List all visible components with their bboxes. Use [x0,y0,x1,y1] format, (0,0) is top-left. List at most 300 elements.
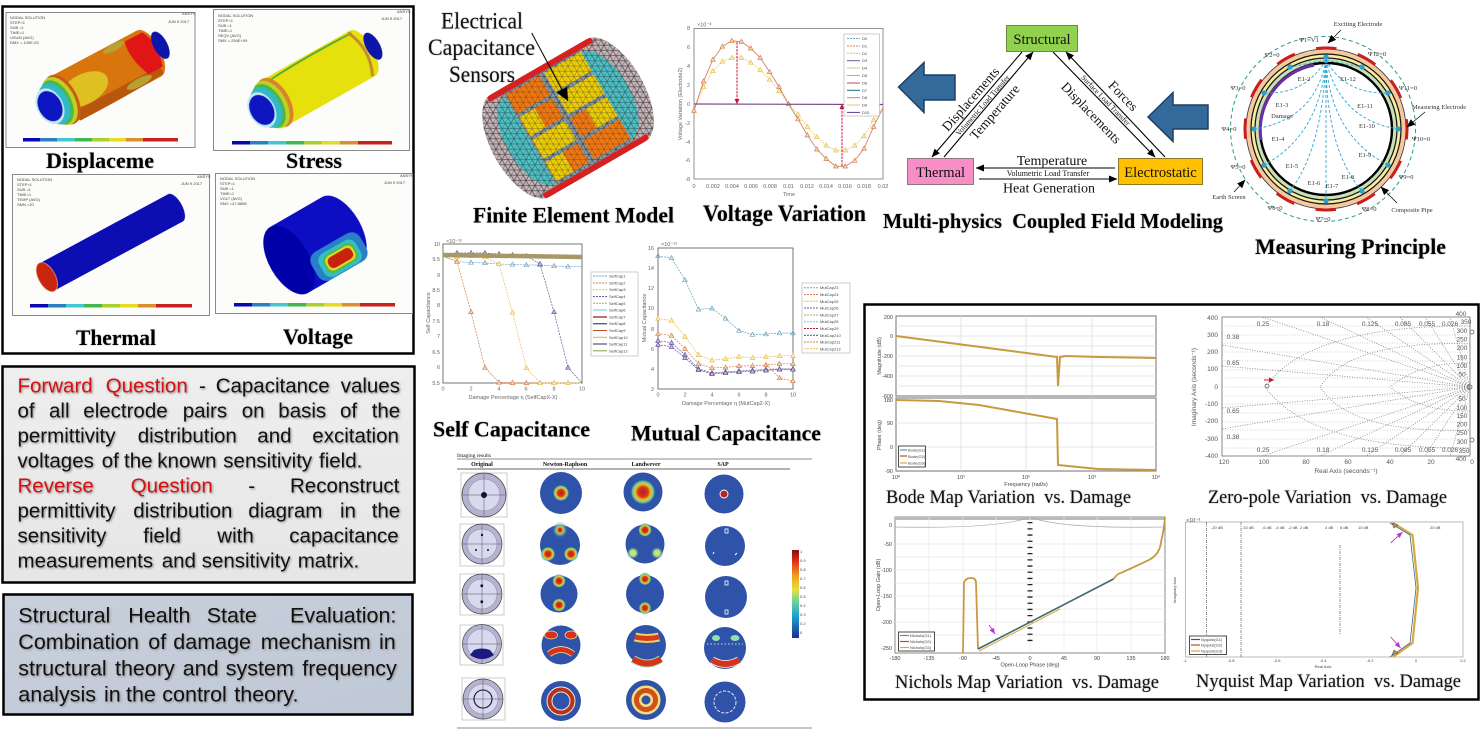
figure: thermal contour: SMN =20 [17,202,35,207]
legend: MutCap24 [820,292,839,297]
panel: forward and reverse question [2,366,414,582]
chart: zero-pole map: 0.38 [1227,434,1240,441]
figure: thermal contour: NODAL SOLUTION [17,177,52,182]
marker: peak arrow [736,42,738,104]
chart: nyquist map: -0.4 [1320,658,1327,663]
chart: nichols map: -250 [881,646,892,652]
chart: voltage variation: -2 [685,121,690,127]
chart: nichols map: 45 [1061,656,1067,662]
chart: nichols map: -45 [992,656,1000,662]
chart: voltage variation: 0.008 [763,184,777,190]
chart: self capacitance: 8 [552,386,556,392]
chart: self capacitance: 8.5 [432,288,440,294]
text block: forward and reverse question: the [124,450,152,473]
potential labels: E1-4 [1272,136,1285,143]
figure: stress contour [214,9,411,150]
coupling labels: Displacements [939,64,1002,134]
chart: voltage variation: 4 [687,64,690,70]
text block: forward and reverse question: permittivity [18,425,116,448]
chart: self capacitance: 10 [579,386,585,392]
text block: forward and reverse question: voltages [18,450,94,473]
magnitude plot: 200 [884,315,893,321]
magnitude plot: 0 [890,334,893,340]
text block: forward and reverse question: Capacitance [216,375,330,398]
arrow: block arrow to voltage chart [898,62,955,112]
panel: structural health state evaluation [4,594,412,714]
phase plot: 0 [890,445,893,451]
text block: forward and reverse question: measurements [18,550,153,573]
legend: MutCap210 [820,333,841,338]
figure: voltage contour: SMX =47.8898 [220,201,247,206]
legend: Bode(G3) [908,460,926,466]
figure: displacement contour: DMX =.130E-03 [10,40,39,45]
text block: structural health state evaluation: structural [18,657,107,681]
chart: voltage variation: ×10⁻⁸ [697,22,712,28]
chart: zero-pole map: 300 [1207,332,1218,339]
chart: zero-pole map: 20 [1427,459,1435,466]
text block: forward and reverse question: of [340,400,357,423]
legend: SelfCap1 [609,274,626,278]
potential labels: Ψ12=0 [1368,51,1386,58]
potential labels: Ψ3=0 [1231,85,1245,92]
chart: mutual capacitance: 10 [790,392,796,398]
table: imaging results [457,453,812,728]
phase plot: -90 [885,469,893,475]
table: imaging results: Imaging results [457,453,491,459]
chart: nyquist map: -1 [1183,658,1188,663]
legend: Bode(G2) [908,454,926,459]
curve [1393,523,1418,657]
dB labels: 10 dB [1358,525,1369,530]
legend: SelfCap2 [609,280,626,286]
chart: zero-pole map: -100 [1205,401,1218,408]
chart: zero-pole map: 0.65 [1227,408,1240,415]
chart: zero-pole map: 200 [1207,349,1218,356]
chart: voltage variation: 8 [687,26,690,32]
figure: displacement contour [6,11,196,148]
text block: structural health state evaluation: damage [173,630,251,654]
phase plot: Frequency (rad/s) [1004,482,1048,488]
damage arrow [989,625,995,634]
chart: zero-pole map: 0.085 [1395,447,1412,454]
curve: SelfCap4 [443,253,582,383]
chart: mutual capacitance: 0 [656,392,660,398]
curve [963,578,978,653]
figure: displacement contour: ANSYS [182,11,196,16]
chart: voltage variation: 0.018 [857,184,871,190]
legend: MutCap29 [820,326,839,331]
chart: zero-pole map: 0.055 [1419,447,1436,454]
text block: forward and reverse question: Question [106,375,188,398]
chart: mutual capacitance: ×10⁻¹³ [661,242,677,248]
chart: zero-pole map: 0.25 [1257,321,1270,328]
dB labels: -10 dB [1242,525,1254,530]
potential labels: Ψ5=0 [1231,164,1245,171]
coupling labels: Forces [1105,78,1141,114]
legend: D1 [862,44,868,48]
figure: thermal contour: JUN 9 2017 [181,181,203,186]
chart: nyquist map: Imaginary Axis [1172,577,1177,603]
chart: nichols map: 90 [1094,656,1100,662]
column headers: SAP [717,462,729,468]
chart: voltage variation: 0.014 [819,184,833,190]
coupling labels: Displacements [1058,79,1124,147]
chart: self capacitance [426,239,638,442]
color bar [792,549,806,638]
box: electrostatic [1118,158,1202,184]
legend: D7 [862,88,868,93]
label: electrical capacitance sensors: Electrical [441,8,523,34]
legend: D3 [862,58,868,63]
figure: thermal contour: SUB =1 [17,187,32,192]
phase plot: 10³ [1088,475,1096,481]
chart: self capacitance: Damage Percentage η (SelfCapX-X) [469,395,558,401]
text block: structural health state evaluation: in [379,630,396,654]
chart: voltage variation: 0 [687,102,690,108]
legend: SelfCap6 [609,308,626,312]
dB labels: -6 dB [1262,525,1272,530]
figure: stress contour: TIME=1 [218,28,233,33]
chart: nyquist map: 0 [1415,658,1418,663]
coupling labels [939,64,1141,196]
chart: zero-pole map: 100 [1259,459,1270,466]
chart: self capacitance: 2 [469,386,473,392]
chart: nichols map: -135 [923,656,935,662]
box: structural [1006,26,1078,52]
legend: SelfCap12 [609,348,628,353]
chart: zero-pole map: 400 [1207,315,1218,322]
chart: voltage variation: -4 [685,140,690,146]
color bar: 0.7 [800,576,806,581]
chart: voltage variation: -6 [685,158,690,164]
chart: zero-pole map: 150 [1457,354,1468,362]
chart: nichols map: -200 [881,620,892,626]
phase plot: 10² [1022,475,1030,481]
caption: zero-pole: Zero-pole Variation vs. Damage [1208,487,1447,508]
label: electrical capacitance sensors: Sensors [449,62,515,87]
chart: zero-pole map: 120 [1219,459,1230,466]
legend: Nichols(G2) [910,639,932,644]
curve: MutCap27 [658,345,793,374]
legend [844,34,880,116]
chart: zero-pole map: 80 [1302,459,1310,466]
curve: MutCap24 [658,334,793,368]
chart: zero-pole map: 0.026 [1442,447,1459,454]
legend: MutCap211 [820,340,841,344]
chart: nichols map [876,517,1170,693]
chart: zero-pole map: 400 [1456,456,1467,463]
legend: MutCap28 [820,319,839,324]
curve: MutCap26 [658,341,793,373]
legend: D4 [862,66,868,70]
text block: forward and reverse question: on [242,400,265,423]
caption: nichols: Nichols Map Variation vs. Damage [895,672,1159,693]
chart: mutual capacitance: 12 [648,286,654,292]
chart: nyquist map: 0.2 [1460,658,1467,663]
rings [1230,36,1416,222]
chart: self capacitance: 6 [524,386,528,392]
column headers: Landwever [632,462,661,468]
text block: structural health state evaluation: system [226,657,294,681]
chart: mutual capacitance: 10 [648,306,654,312]
legend: D5 [862,73,868,78]
chart: mutual capacitance: 4 [651,367,654,373]
figure: voltage contour: STEP=1 [220,181,236,186]
chart: nichols map: Open-Loop Phase (deg) [1000,662,1060,668]
text block: forward and reverse question: values [341,375,400,398]
dB labels: -2 dB [1288,525,1298,530]
figure: stress contour: NODAL SOLUTION [218,13,253,18]
legend: SelfCap9 [609,328,626,333]
legend: SelfCap8 [609,321,626,326]
magnitude plot: Magnitude (dB) [877,337,883,375]
damage arrows [1391,532,1402,543]
column headers: Original [471,462,493,468]
text block: structural health state evaluation: control [162,683,227,707]
chart: mutual capacitance: 16 [648,246,654,252]
color bar: 0.4 [800,603,806,608]
curve: SelfCap3 [443,254,582,383]
chart: zero-pole map: 0.026 [1442,321,1459,328]
caption: self capacitance: Self Capacitance [433,416,590,442]
potential labels: E1-6 [1308,180,1321,187]
dB labels: -4 dB [1275,525,1285,530]
box: thermal: Thermal [916,165,965,181]
coupling labels: Surface Load Transfer [1079,73,1133,128]
legend: MutCap23 [820,285,839,290]
text block: forward and reverse question: diagram [248,500,322,523]
phase plot: 180 [884,398,893,404]
pole and zero markers [1265,330,1474,442]
figure: thermal contour: TIME=1 [17,192,32,197]
chart: zero-pole map: 350 [1459,448,1470,455]
legend: SelfCap3 [609,287,626,292]
chart: mutual capacitance: 8 [764,392,768,398]
text block: forward and reverse question: and [162,550,196,573]
chart: zero-pole map: 0.25 [1257,447,1270,454]
potential labels: E1-8 [1342,174,1354,181]
legend [802,283,850,353]
coupling labels: Volumetric Load Transfer [1007,169,1090,178]
text block: structural health state evaluation: Evaluation: [290,603,396,627]
figure: voltage contour: JUN 9 2017 [384,180,406,185]
figure: voltage contour: SUB =1 [220,186,235,191]
chart: voltage variation: 2 [687,83,690,89]
text block: structural health state evaluation: in [104,683,121,707]
chart: voltage variation: 0.004 [725,184,739,190]
potential labels: Ψ1=V1 [1299,37,1319,44]
legend: D9 [862,102,868,108]
chart: zero-pole map: 0.125 [1362,447,1379,454]
figure: displacement contour: STEP=1 [10,20,26,25]
chart: zero-pole map: 0.125 [1362,321,1379,328]
column: Newton-Raphson reconstructions [540,472,582,721]
figure: stress contour: STEP=1 [218,18,234,23]
potential labels: E1-11 [1357,103,1373,110]
legend: MutCap25 [820,299,839,304]
chart: zero-pole map: 60 [1344,459,1352,466]
caption: Stress: Stress [286,148,342,173]
figure: stress contour: JUN 9 2017 [381,16,403,21]
potential labels: Ψ9=0 [1399,174,1413,181]
legend: SelfCap7 [609,314,626,320]
arrows: coupling [932,52,1165,179]
chart: zero-pole map: -300 [1205,436,1218,443]
legend: Nyquist(G1) [1201,637,1223,642]
legend: D10 [862,110,870,115]
text block: structural health state evaluation: State [207,603,257,627]
text block: forward and reverse question: of [102,450,119,473]
chart: self capacitance: 5.5 [432,381,440,387]
chart: voltage variation: 0.01 [783,184,794,190]
phase plot: 10¹ [957,475,965,481]
chart: self capacitance: 6.5 [432,350,440,356]
text block: structural health state evaluation: Health [128,603,190,627]
chart: voltage variation: 0.02 [878,184,888,190]
chart: nichols map: 0 [1028,656,1032,662]
chart: zero-pole map: 300 [1457,439,1468,446]
chart: mutual capacitance [631,242,850,446]
text block: structural health state evaluation: theory. [234,683,298,707]
chart: voltage variation [678,22,888,226]
legend: Nyquist(G2) [1201,642,1223,648]
color bar: 1 [800,549,803,554]
caption: multi-physics coupled field modeling: Multi-physics Coupled Field Modeling [883,209,1223,233]
box: electrostatic: Electrostatic [1124,165,1197,181]
chart: voltage variation: 0.012 [800,184,814,190]
color bar: 0.6 [800,585,806,590]
figure: voltage contour [216,173,414,314]
figure: thermal contour: STEP=1 [17,182,33,187]
chart: zero-pole map: 350 [1461,319,1472,326]
chart: zero-pole map: 250 [1457,336,1468,344]
chart: zero-pole map: 40 [1386,459,1394,466]
caption: voltage variation: Voltage Variation [703,201,866,226]
dB labels: -20 dB [1211,525,1223,530]
text block: forward and reverse question: the [372,400,400,423]
text block: forward and reverse question: matrix. [298,550,359,573]
chart: mutual capacitance: 4 [710,392,714,398]
text block: forward and reverse question: capacitance [289,525,399,548]
legend [591,272,638,356]
chart: bode map [877,315,1161,508]
panel: frequency analysis [864,304,1478,700]
text block: forward and reverse question: and [257,425,292,448]
chart: nichols map: -180 [889,656,901,662]
color bar: 0.8 [800,567,806,572]
figure: stress contour: SUB =1 [218,23,233,28]
figure: displacement contour: JUN 9 2017 [168,19,190,24]
figure: finite element model [428,8,676,228]
text block: forward and reverse question: electrode [83,400,168,423]
chart: nichols map: 0 [889,523,892,529]
chart: self capacitance: 7 [437,334,440,340]
chart: zero-pole map: 100 [1457,363,1468,370]
chart: self capacitance: 9 [437,273,440,279]
text block: structural health state evaluation: Structural [18,603,110,627]
chart: zero-pole map: 200 [1457,345,1468,352]
potential labels: Ψ7=0 [1316,216,1330,223]
text block: forward and reverse question: all [49,400,70,423]
text block: structural health state evaluation: frequency [302,657,397,681]
damage arc [1260,65,1314,140]
phase plot [877,398,1161,488]
text block: forward and reverse question: the [372,500,400,523]
figure: voltage contour: ANSYS [400,173,414,178]
mesh cylinder [482,38,654,198]
caption: bode: Bode Map Variation vs. Damage [886,487,1131,508]
legend: D0 [862,36,868,41]
chart: nichols map: -100 [881,568,892,574]
figure: thermal contour [12,174,211,316]
figure: voltage contour: NODAL SOLUTION [220,176,255,181]
caption: nyquist: Nyquist Map Variation vs. Damage [1196,671,1461,692]
chart: mutual capacitance: 6 [737,392,741,398]
chart: voltage variation: 0.016 [838,184,852,190]
chart: zero-pole map: 50 [1458,396,1466,403]
text block: structural health state evaluation: Combination [18,630,139,654]
chart: zero-pole map: 200 [1457,422,1468,428]
legend: D6 [862,80,868,86]
potential labels: Measuring Electrode [1412,104,1466,111]
text block: structural health state evaluation: analysis [18,683,96,707]
column headers [471,462,729,468]
chart: nyquist map: Real Axis [1315,664,1331,669]
legend: Nyquist(G3) [1201,648,1223,654]
chart: mutual capacitance: 8 [651,327,654,333]
column: original phantoms [460,473,507,720]
caption: Thermal: Thermal [76,325,156,350]
chart: mutual capacitance: 14 [648,266,654,272]
potential labels: Ψ4=0 [1222,126,1236,133]
caption: finite element model: Finite Element Model [473,202,674,228]
legend: D2 [862,51,868,56]
chart: nichols map: -150 [881,594,892,600]
legend: MutCap26 [820,306,839,310]
chart: zero-pole map: -400 [1205,453,1218,460]
text block: forward and reverse question: sensitivity [223,450,313,473]
potential labels: Ψ8=0 [1362,206,1376,213]
text block: forward and reverse question: distribution [138,425,237,448]
panel: FEA simulation results [2,6,414,354]
figure: voltage contour: VOLT (AVG) [220,196,243,201]
text block: structural health state evaluation: the [126,683,156,707]
coupling labels: Temperature [1017,154,1087,169]
legend: Nichols(G1) [910,633,932,638]
marker: trough arrow [841,104,843,166]
legend: D8 [862,95,868,100]
color bar: 0 [800,630,803,635]
chart: voltage variation: -8 [685,177,690,183]
chart: zero-pole map: Imaginary Axis (seconds⁻¹) [1191,348,1198,426]
caption: mutual capacitance: Mutual Capacitance [631,420,821,446]
potential labels: E1-7 [1326,183,1339,190]
chart: voltage variation: 0.002 [706,184,720,190]
box: thermal [908,158,974,184]
curve: SelfCap2 [443,256,582,383]
chart: nichols map: 180 [1160,656,1170,662]
chart: voltage variation: Time [783,192,795,198]
chart: zero-pole map: 50 [1458,372,1466,378]
chart: self capacitance: 8 [437,303,440,309]
phase plot: 90 [887,421,893,427]
coupling labels: Temperature [967,81,1023,143]
label: electrical capacitance sensors [428,8,535,87]
chart: nyquist map: -0.2 [1367,658,1374,663]
text block: forward and reverse question: permittivity [18,500,116,523]
figure: stress contour: ANSYS [397,9,411,14]
chart: zero-pole map: 0.18 [1317,447,1330,454]
